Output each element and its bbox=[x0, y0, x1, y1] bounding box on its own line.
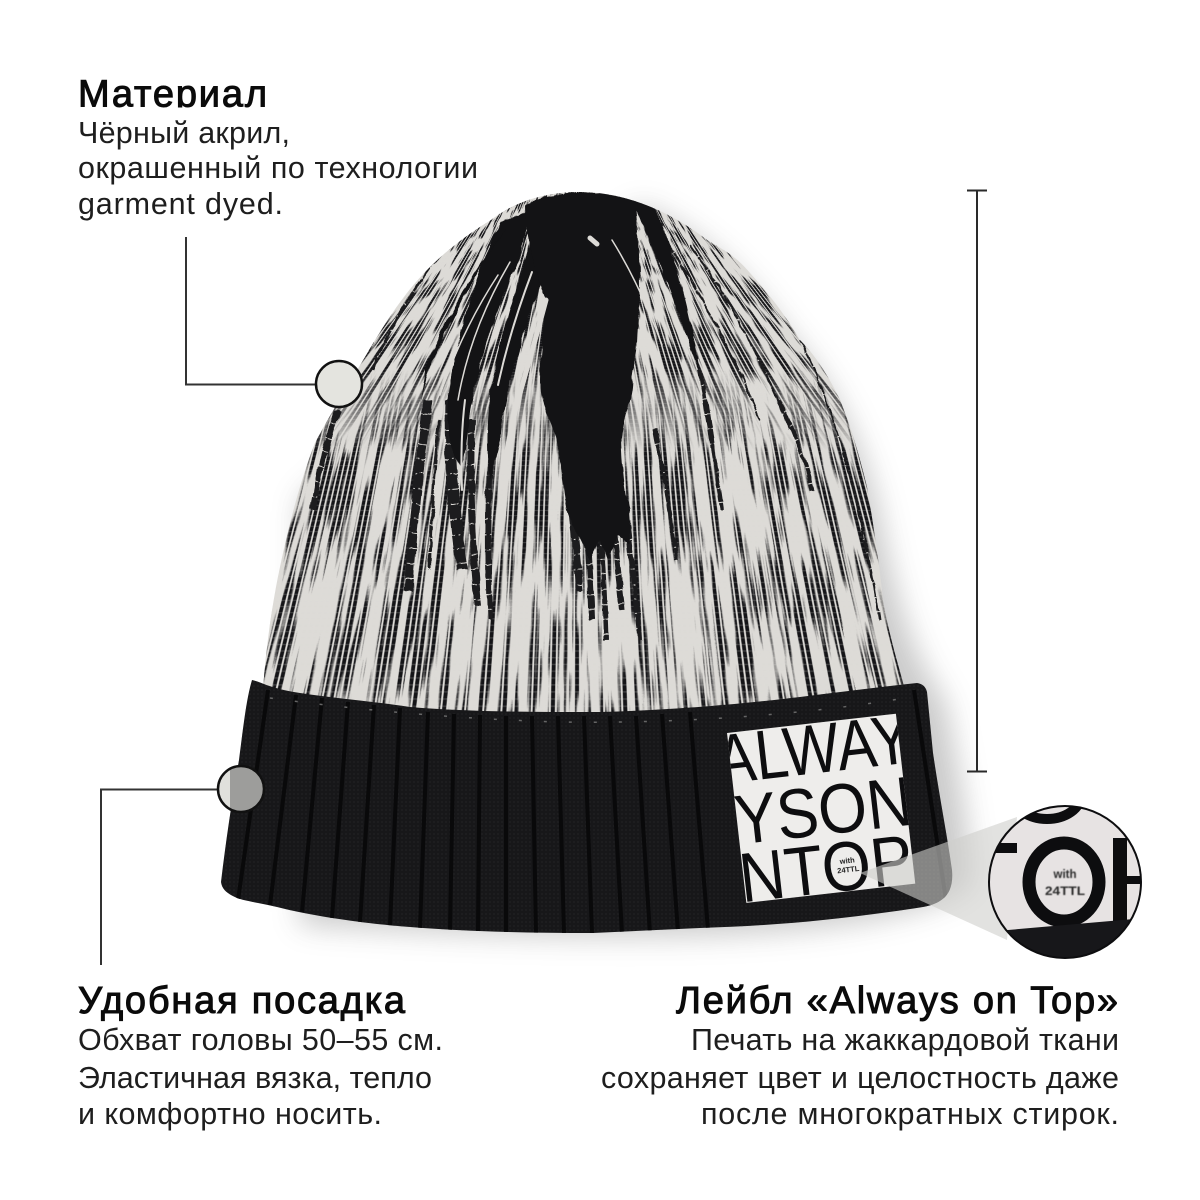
lens letter P bbox=[1113, 838, 1127, 921]
label wordmark: NTOP bbox=[735, 820, 917, 917]
lens caption bbox=[1045, 869, 1085, 898]
hat illustration bbox=[215, 192, 960, 940]
lens top letter arc bbox=[1024, 807, 1082, 824]
crown streak texture: upper bbox=[316, 192, 852, 446]
height bracket bbox=[967, 190, 987, 772]
heading: fit: Удобная посадка bbox=[78, 980, 406, 1022]
label small logo: with bbox=[838, 855, 856, 866]
body: material: garment dyed. bbox=[78, 187, 283, 221]
label small logo: 24TTL bbox=[837, 864, 860, 875]
label wordmark bbox=[728, 718, 908, 902]
body: material bbox=[78, 116, 478, 221]
body: label: после многократных стирок. bbox=[701, 1097, 1119, 1131]
body: material: Чёрный акрил, bbox=[78, 116, 290, 150]
heading: label: Лейбл «Always on Top» bbox=[676, 980, 1118, 1022]
lens fabric edge bbox=[1008, 919, 1130, 957]
cuff bbox=[215, 675, 960, 940]
body: fit bbox=[78, 1023, 443, 1131]
body: label: Печать на жаккардовой ткани bbox=[691, 1023, 1119, 1057]
magnifier wedge bbox=[860, 817, 1017, 940]
lens caption: 24TTL bbox=[1045, 886, 1085, 898]
body: label: сохраняет цвет и целостность даже bbox=[601, 1061, 1119, 1095]
lens letter O bbox=[1029, 843, 1099, 921]
text block: label bbox=[601, 980, 1119, 1131]
light slits bbox=[440, 238, 662, 490]
magnifier lens: label detail bbox=[996, 807, 1140, 957]
magnifier ring bbox=[989, 806, 1141, 958]
fan streaks bbox=[313, 222, 880, 640]
lens T bar bbox=[996, 843, 1017, 853]
heading: material: Материал bbox=[78, 74, 267, 116]
frayed ends of the left fan bbox=[450, 400, 462, 570]
body: fit: Эластичная вязка, тепло bbox=[78, 1061, 432, 1095]
crown streak texture: lower bbox=[264, 374, 904, 712]
label wordmark: ALWAY bbox=[712, 699, 915, 799]
body: label bbox=[601, 1023, 1119, 1131]
right fan bands bbox=[636, 202, 698, 370]
text block: fit bbox=[78, 980, 443, 1131]
cuff stitches bbox=[270, 698, 905, 722]
foreground artwork bbox=[78, 80, 1142, 1130]
cuff knit texture bbox=[215, 675, 960, 940]
lens caption: with bbox=[1052, 869, 1076, 881]
infographic canvas bbox=[78, 80, 1142, 1130]
body: fit: и комфортно носить. bbox=[78, 1097, 382, 1131]
left fan bands bbox=[414, 212, 550, 480]
callout: material leader bbox=[186, 237, 362, 407]
central dark stain bbox=[525, 192, 640, 560]
callout marker: material bbox=[316, 361, 362, 407]
label small logo bbox=[837, 857, 860, 874]
text block: material bbox=[78, 74, 478, 221]
crown dye marks bbox=[313, 192, 880, 640]
body: material: окрашенный по технологии bbox=[78, 151, 478, 185]
body: fit: Обхват головы 50–55 см. bbox=[78, 1023, 443, 1057]
callout: fit leader bbox=[101, 764, 264, 965]
callout marker: fit bbox=[216, 764, 264, 814]
label wordmark: YSON bbox=[731, 762, 916, 859]
frayed ends of the stain bbox=[572, 510, 580, 590]
woven label bbox=[727, 714, 916, 903]
